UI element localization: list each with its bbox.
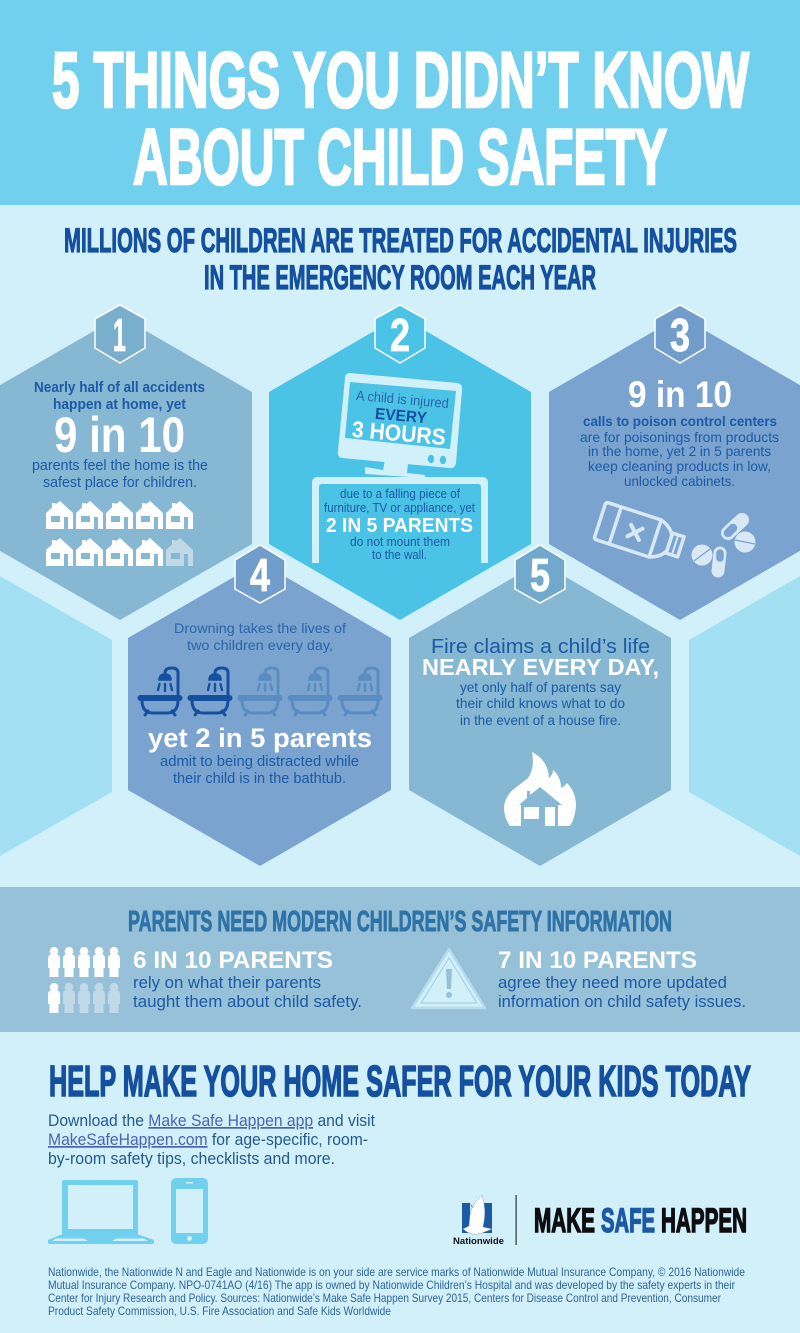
badge 4	[235, 545, 285, 603]
panel 4 lower text	[148, 723, 372, 787]
badge 5	[515, 545, 565, 603]
icon: house on fire	[504, 752, 576, 826]
decorative side hexagon right	[689, 576, 800, 856]
decorative side hexagon left	[0, 576, 112, 856]
panel 4 lower text: admit to being distracted while	[160, 754, 359, 770]
tv text: EVERY	[374, 406, 428, 427]
panel 5 text: their child knows what to do	[456, 695, 625, 711]
icon: tv monitor	[338, 373, 462, 478]
title	[52, 35, 749, 201]
panel 2: falling furniture	[269, 305, 531, 620]
badge 5: 5	[530, 549, 550, 601]
panel 5 text: in the event of a house fire.	[460, 712, 621, 728]
panel 4 upper text: Drowning takes the lives of	[174, 620, 346, 636]
icon: poison bottle	[594, 502, 687, 565]
panel 1 text: Nearly half of all accidents	[34, 380, 205, 396]
furniture text: to the wall.	[372, 548, 427, 562]
fine print	[48, 1265, 745, 1318]
logo: Make Safe Happen	[534, 1202, 747, 1240]
badge 3: 3	[670, 309, 690, 361]
stat: 6 in 10	[133, 947, 362, 1011]
stat: 6 in 10: taught them about child safety.	[133, 992, 362, 1011]
logo: Make Safe Happen: HAPPEN	[661, 1202, 747, 1240]
badge 1: 1	[113, 309, 126, 361]
furniture text: 2 IN 5 PARENTS	[326, 515, 473, 537]
tv text	[351, 387, 450, 450]
call to action text: by-room safety tips, checklists and more.	[48, 1149, 335, 1168]
icon: smartphone	[171, 1178, 208, 1244]
stat: 7 in 10	[498, 947, 746, 1011]
badge 3	[655, 305, 705, 363]
panel 4: drowning	[128, 545, 391, 866]
badge 2	[375, 305, 425, 363]
logo divider	[516, 1195, 517, 1245]
badge 4: 4	[250, 549, 270, 601]
furniture text	[324, 487, 475, 562]
icon: warning triangle	[412, 949, 485, 1008]
furniture text: due to a falling piece of	[340, 487, 460, 501]
panel 3 text: are for poisonings from products	[580, 429, 779, 445]
icon: laptop	[48, 1180, 154, 1244]
panel 3 text: in the home, yet 2 in 5 parents	[588, 443, 771, 459]
panel 4 upper text	[174, 620, 346, 653]
panel 5 text	[422, 635, 659, 728]
stat: 7 in 10: information on child safety issues.	[498, 992, 746, 1011]
panel 1 text	[32, 380, 208, 491]
icon: bathtubs 2 of 5	[139, 668, 381, 715]
icon: people 6 of 10	[48, 947, 120, 1013]
furniture text: furniture, TV or appliance, yet	[324, 501, 475, 515]
panel 1 text: safest place for children.	[43, 474, 197, 491]
panel 3 text: 9 in 10	[628, 374, 732, 415]
header band	[0, 0, 800, 205]
panel 1 text: 9 in 10	[54, 407, 185, 463]
badge 1	[95, 305, 145, 363]
panel 4 upper text: two children every day,	[187, 637, 333, 653]
stat: 6 in 10: rely on what their parents	[133, 973, 321, 992]
fine print: Product Safety Commission, U.S. Fire Association and Safe Kids Worldwide	[48, 1304, 391, 1318]
logo: Make Safe Happen: MAKE	[534, 1202, 595, 1240]
logo: Nationwide	[453, 1195, 504, 1246]
panel 4 lower text: yet 2 in 5 parents	[148, 723, 372, 753]
panel 5: fire	[409, 545, 671, 866]
call to action text: Download the Make Safe Happen app and visit	[48, 1111, 375, 1130]
panel 5 text: Fire claims a child’s life	[431, 635, 650, 658]
panel 5 text: yet only half of parents say	[460, 679, 621, 695]
icon: houses 9 of 10	[46, 501, 193, 566]
stat: 7 in 10: 7 IN 10 PARENTS	[498, 947, 697, 974]
furniture text: do not mount them	[350, 535, 450, 549]
stat: 7 in 10: agree they need more updated	[498, 973, 727, 992]
call to action text	[48, 1111, 375, 1168]
logo: Make Safe Happen: SAFE	[601, 1202, 655, 1240]
panel 1 text: happen at home, yet	[53, 397, 186, 413]
logo: Nationwide: Nationwide	[453, 1236, 504, 1246]
tv text: A child is injured	[355, 387, 450, 411]
badge 2: 2	[390, 309, 410, 361]
subtitle	[64, 222, 737, 297]
panel 4 lower text: their child is in the bathtub.	[173, 771, 346, 787]
panel 3 text	[580, 374, 779, 489]
band: modern information	[0, 887, 800, 1032]
panel 1: accidents at home	[0, 305, 252, 620]
panel 3 text: unlocked cabinets.	[624, 473, 735, 489]
panel 3: poison	[549, 305, 800, 620]
tv text: 3 HOURS	[351, 416, 447, 450]
icon: pills	[692, 520, 756, 571]
panel 3 text: keep cleaning products in low,	[588, 458, 771, 474]
panel 3 text: calls to poison control centers	[583, 414, 777, 429]
call to action text: MakeSafeHappen.com for age-specific, room-	[48, 1130, 368, 1149]
panel 5 text: NEARLY EVERY DAY,	[422, 654, 659, 680]
panel 1 text: parents feel the home is the	[32, 457, 208, 474]
icon: furniture frame	[312, 477, 488, 563]
stat: 6 in 10: 6 IN 10 PARENTS	[133, 947, 333, 974]
